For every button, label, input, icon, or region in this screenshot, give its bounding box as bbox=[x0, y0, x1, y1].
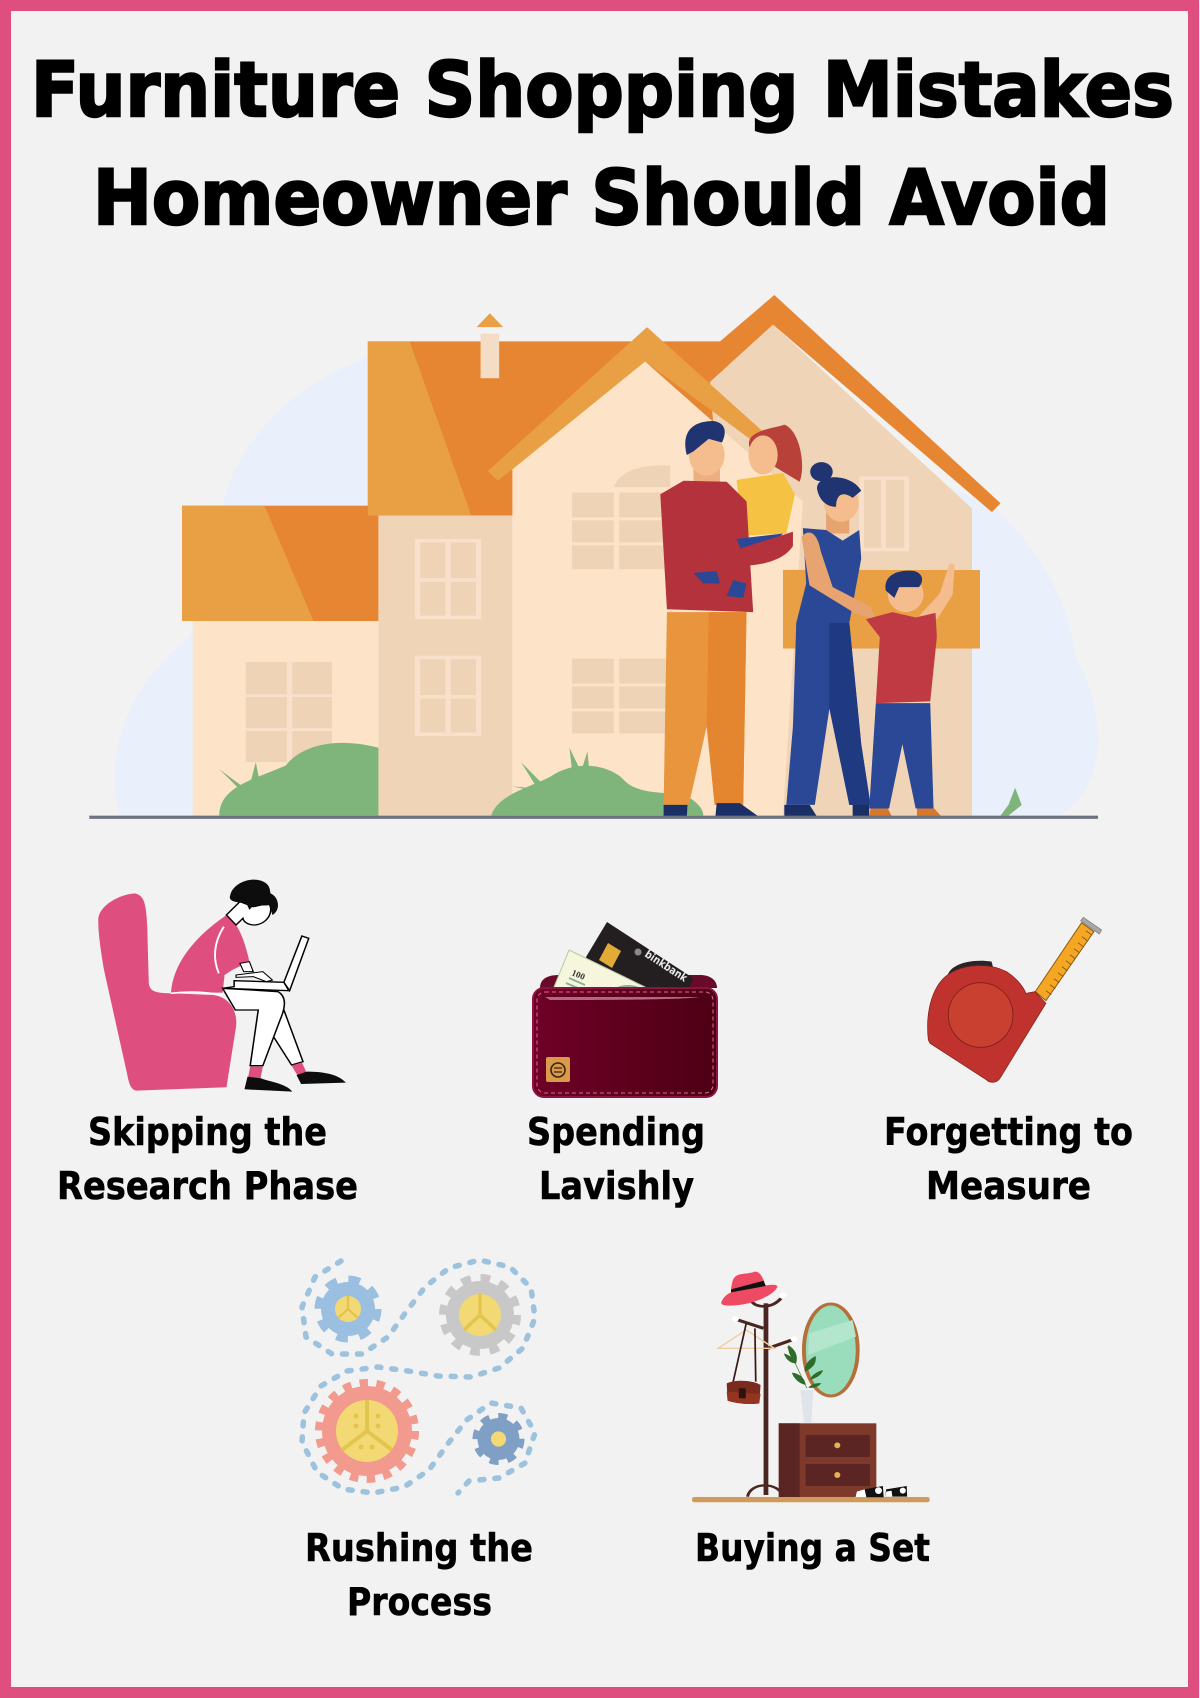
woman bbox=[784, 462, 876, 817]
icon: wallet with card and cash: binkbank bbox=[642, 948, 690, 985]
icon: coat rack, mirror and dresser bbox=[692, 1272, 930, 1502]
bushes bbox=[219, 743, 1022, 816]
label: Rushing the Process: Process bbox=[347, 1580, 492, 1624]
label: Spending Lavishly: Lavishly bbox=[539, 1164, 694, 1208]
label: Skipping the Research Phase bbox=[57, 1110, 358, 1208]
label: Forgetting to Measure bbox=[884, 1110, 1133, 1208]
illustration: family in front of house bbox=[89, 295, 1098, 819]
windows bbox=[246, 465, 909, 762]
label: Skipping the Research Phase: Skipping the bbox=[88, 1110, 327, 1154]
icon: gears and dashed path bbox=[302, 1260, 535, 1493]
label: Rushing the Process: Rushing the bbox=[305, 1526, 533, 1570]
icon: wallet with card and cash: 100 bbox=[570, 968, 587, 982]
label: Skipping the Research Phase: Research Phase bbox=[57, 1164, 358, 1208]
label: Buying a Set: Buying a Set bbox=[695, 1526, 930, 1570]
icon: tape measure bbox=[928, 917, 1102, 1082]
label: Forgetting to Measure: Forgetting to bbox=[884, 1110, 1133, 1154]
title bbox=[31, 45, 1174, 242]
boy bbox=[866, 564, 952, 817]
label: Rushing the Process bbox=[305, 1526, 533, 1624]
man holding girl bbox=[660, 421, 802, 817]
icon: person on laptop in armchair bbox=[98, 880, 346, 1092]
label: Forgetting to Measure: Measure bbox=[926, 1164, 1091, 1208]
title: Homeowner Should Avoid bbox=[93, 153, 1110, 242]
label: Spending Lavishly: Spending bbox=[527, 1110, 705, 1154]
ground line bbox=[89, 816, 1098, 819]
icon: wallet with card and cash bbox=[533, 922, 717, 1097]
label: Spending Lavishly bbox=[527, 1110, 705, 1208]
